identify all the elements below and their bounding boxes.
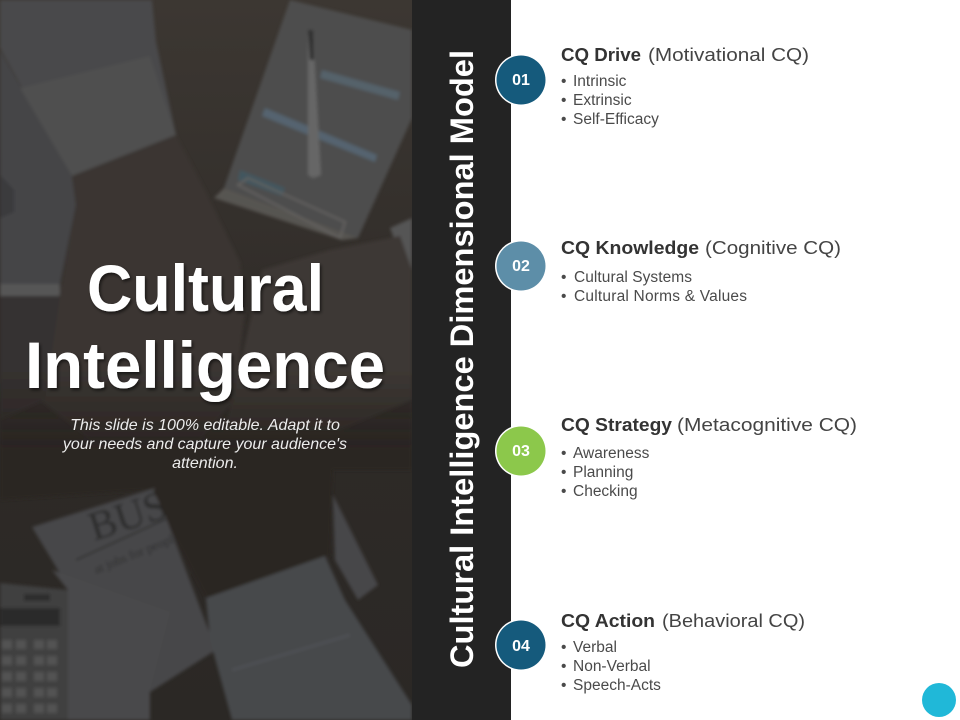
subtitle text: [62, 417, 347, 472]
heading 04: [561, 610, 805, 631]
list 03: •: [561, 464, 566, 481]
newspaper: [32, 488, 216, 692]
list 04: Verbal: [573, 639, 617, 656]
panel: darkened desk photo: at jobs for people: [92, 529, 181, 577]
vertical heading: Cultural Intelligence Dimensional Model: [444, 50, 480, 668]
white corner paper: [390, 218, 412, 285]
list 01: Intrinsic: [573, 73, 627, 90]
list 03: Awareness: [573, 445, 650, 462]
badge 02: 02: [512, 258, 530, 275]
subtitle text: attention.: [172, 455, 238, 472]
list 01: Self-Efficacy: [573, 111, 659, 128]
title: Intelligence: [25, 328, 385, 402]
white folded paper: [52, 570, 170, 720]
shadowed lower hand: [0, 370, 412, 598]
panel: darkened desk photo: BUS: [83, 481, 173, 550]
badge 03: 03: [512, 443, 530, 460]
title: Cultural: [87, 251, 324, 325]
subtitle text: This slide is 100% editable. Adapt it to: [70, 417, 340, 434]
list 04: •: [561, 677, 566, 694]
item 01: [495, 44, 809, 128]
list 04: [561, 639, 661, 694]
heading 01: (Motivational CQ): [648, 44, 809, 65]
heading 02: (Cognitive CQ): [705, 237, 841, 258]
list 04: •: [561, 639, 566, 656]
list 01: •: [561, 73, 566, 90]
heading 03: [561, 414, 857, 435]
list 02: [561, 269, 747, 305]
shirt cuff: [206, 556, 412, 720]
item 02: [495, 237, 841, 305]
list 03: Planning: [573, 464, 633, 481]
heading 02: [561, 237, 841, 258]
pen: [308, 30, 321, 178]
list 02: Cultural Norms & Values: [574, 288, 747, 305]
item 03: [495, 414, 857, 500]
badge 01: [495, 54, 547, 106]
list 01: •: [561, 92, 566, 109]
badge 03: [495, 425, 547, 477]
heading 03: CQ Strategy: [561, 414, 673, 435]
heading 04: (Behavioral CQ): [662, 610, 805, 631]
list 03: [561, 445, 650, 500]
panel: darkened desk photo: [0, 0, 412, 720]
left paper: [0, 50, 76, 290]
list 03: •: [561, 483, 566, 500]
panel: dark vertical band: [412, 0, 511, 720]
title: [25, 251, 385, 402]
badge 01: 01: [512, 72, 530, 89]
left dark desk: [0, 296, 60, 420]
list 03: •: [561, 445, 566, 462]
invoice clipboard: [224, 0, 412, 238]
list 02: Cultural Systems: [574, 269, 692, 286]
list 02: •: [561, 269, 566, 286]
list 01: •: [561, 111, 566, 128]
heading 01: CQ Drive: [561, 44, 641, 65]
list 02: •: [561, 288, 566, 305]
list 04: •: [561, 658, 566, 675]
heading 02: CQ Knowledge: [561, 237, 699, 258]
calculator: [0, 583, 68, 720]
subtitle text: your needs and capture your audience's: [62, 436, 347, 453]
list 03: Checking: [573, 483, 638, 500]
list 04: Non-Verbal: [573, 658, 651, 675]
badge 02: [495, 240, 547, 292]
list 01: [561, 73, 659, 128]
heading 04: CQ Action: [561, 610, 655, 631]
upper fist and arm: [40, 135, 245, 440]
right fist: [225, 236, 412, 430]
top sleeve: [0, 0, 176, 176]
badge 04: 04: [512, 638, 530, 655]
list 01: Extrinsic: [573, 92, 632, 109]
list 04: Speech-Acts: [573, 677, 661, 694]
badge 04: [495, 619, 547, 671]
heading 01: [561, 44, 809, 65]
corner dot: [922, 683, 956, 717]
central dark hand: [153, 470, 333, 598]
item 04: [495, 610, 805, 694]
heading 03: (Metacognitive CQ): [677, 414, 857, 435]
